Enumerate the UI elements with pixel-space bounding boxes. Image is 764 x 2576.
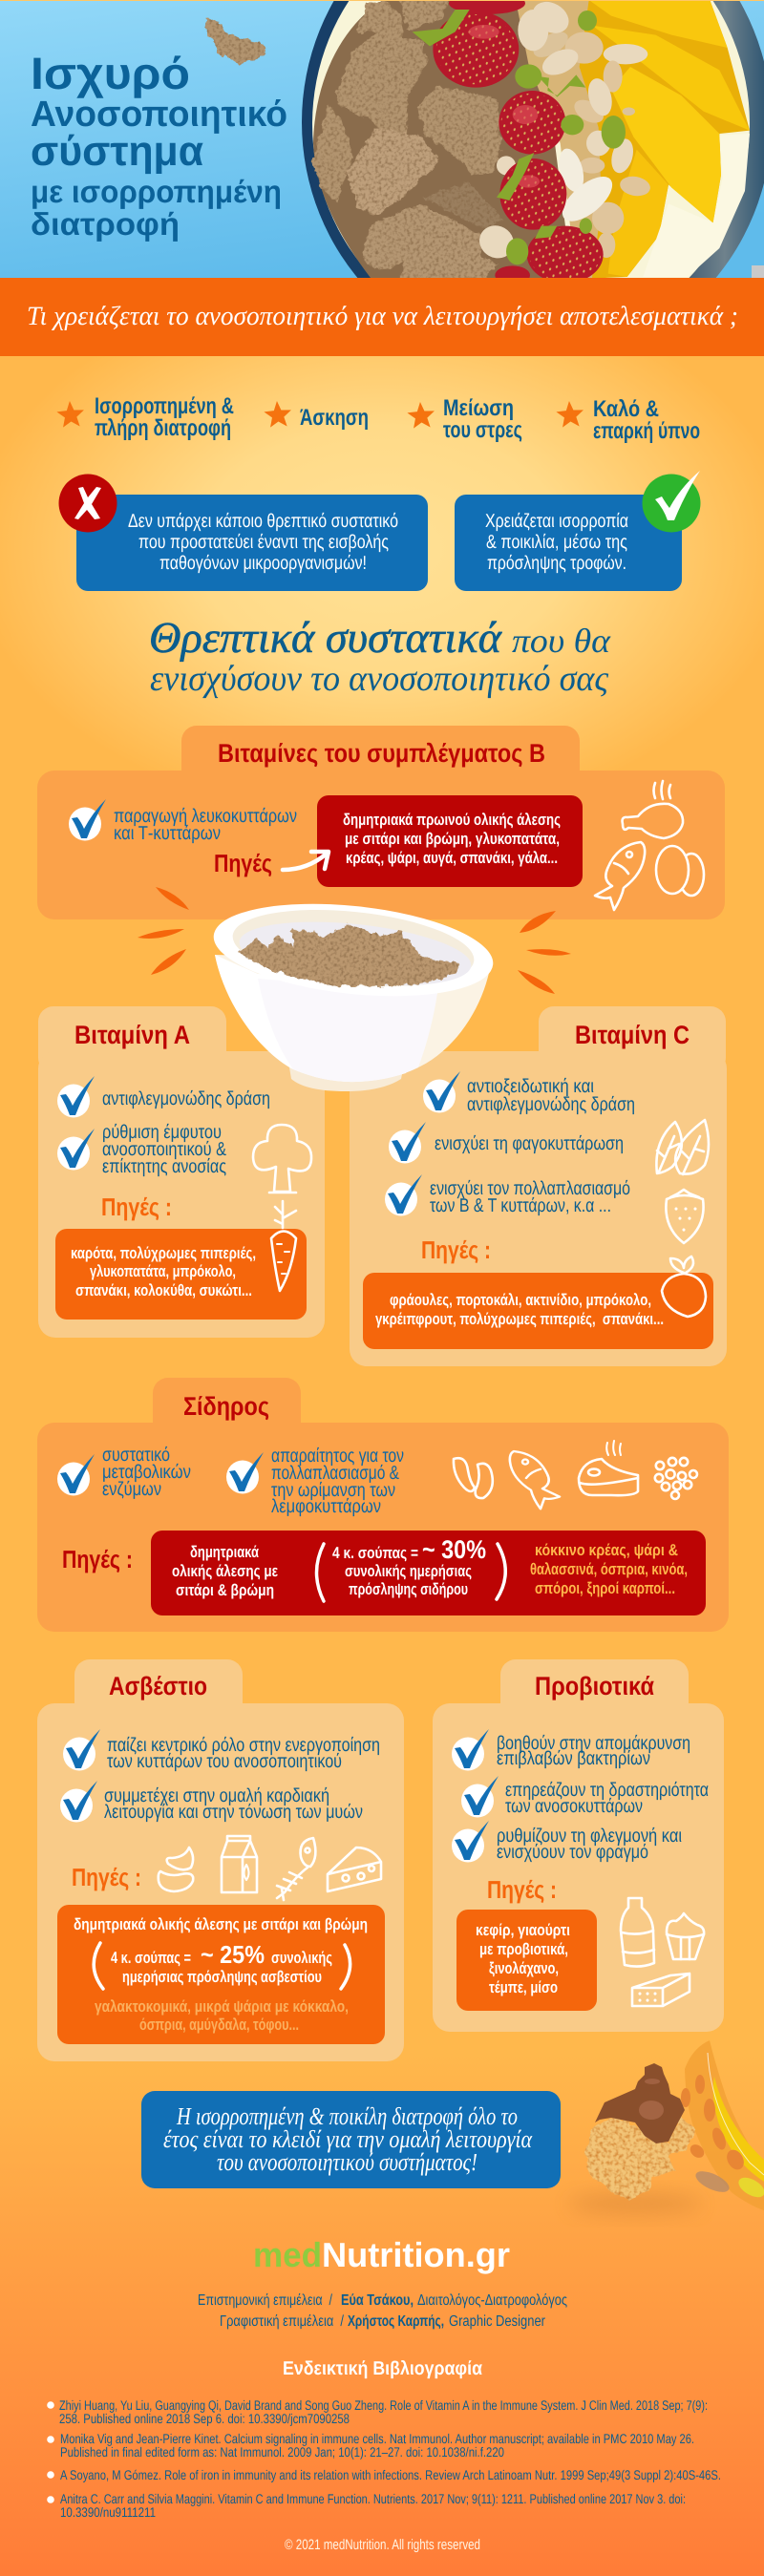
check item: ρυθμίζουν τη φλεγμονή και (497, 1826, 682, 1847)
icon: milk carton (222, 1836, 257, 1892)
check item (461, 1776, 709, 1818)
credits: Εύα Τσάκου, (341, 2292, 414, 2309)
sources box: πρόσληψης σιδήρου (349, 1580, 468, 1598)
burst rays (138, 887, 571, 994)
check item (57, 1445, 191, 1500)
check item (226, 1446, 404, 1517)
check item: την ωρίμανση των (271, 1480, 395, 1501)
heading: iron: Σίδηρος (183, 1392, 269, 1421)
sources box: με προβιοτικά, (479, 1940, 568, 1958)
check item: των ανοσοκυττάρων (505, 1796, 643, 1817)
check item: λεμφοκυττάρων (271, 1496, 381, 1517)
need: balanced diet: πλήρη διατροφή (95, 415, 231, 441)
sources box (317, 795, 583, 887)
sources box: καρότα, πολύχρωμες πιπεριές, (71, 1244, 256, 1262)
sources box: συνολικής ημερήσιας (345, 1562, 472, 1580)
bibliography list: 10.3390/nu9111211 (60, 2504, 156, 2520)
sources box: ημερήσιας πρόσληψης ασβεστίου (122, 1968, 322, 1986)
callout: no single nutrient: που προστατεύει έναντι της εισβολής (138, 532, 389, 553)
title (31, 48, 287, 242)
icon: meat with steam (579, 1441, 638, 1495)
sources box: κρέας, ψάρι, αυγά, σπανάκι, γάλα... (346, 849, 558, 867)
logo: Nutrition.gr (322, 2235, 510, 2274)
credits: Γραφιστική επιμέλεια / (220, 2313, 344, 2330)
copyright: © 2021 medNutrition. All rights reserved (285, 2537, 480, 2553)
icon: leaves (656, 1120, 709, 1174)
sources box: 4 κ. σούπας = (111, 1949, 191, 1967)
closing message: Η ισορροπημένη & ποικίλη διατροφή όλο το (176, 2102, 518, 2130)
hero banner (0, 1, 764, 278)
check item: ενζύμων (102, 1479, 161, 1500)
sources box: σιτάρι & βρώμη (176, 1581, 274, 1599)
icon: bottle (621, 1898, 654, 1967)
heading: calcium: Ασβέστιο (109, 1672, 207, 1700)
icon: carrot (271, 1201, 296, 1291)
sources box: δημητριακά ολικής άλεσης με σιτάρι και βρώμη (74, 1915, 368, 1933)
cookie (585, 2117, 695, 2201)
bibliography list (47, 2397, 721, 2520)
chocolate (595, 2063, 685, 2143)
sources box: σπόροι, ξηροί καρποί... (535, 1579, 675, 1597)
swoosh (681, 2040, 764, 2210)
need: good sleep (556, 396, 700, 444)
check item: αντιφλεγμονώδης δράση (467, 1094, 635, 1115)
callout: balance and variety (455, 471, 701, 591)
sources box: όσπρια, αμύγδαλα, τόφου... (139, 2016, 299, 2034)
closing message: έτος είναι το κλειδί για την ομαλή λειτουργία (163, 2125, 533, 2153)
check item: ανοσοποιητικού & (102, 1139, 227, 1160)
check item (69, 799, 297, 844)
icon: orange (662, 1256, 706, 1317)
credits: Graphic Designer (449, 2313, 546, 2330)
heading: vitamin A: Βιταμίνη Α (74, 1021, 190, 1049)
sources box: 4 κ. σούπας = (332, 1544, 418, 1562)
need: balanced diet (56, 393, 234, 441)
sources box: ~ 30% (422, 1535, 486, 1564)
icon: cheese (328, 1848, 381, 1891)
check item (452, 1821, 682, 1863)
check item: και Τ-κυττάρων (114, 823, 221, 844)
sources box: σπανάκι, κολοκύθα, συκώτι... (75, 1281, 252, 1299)
check item (57, 1122, 227, 1177)
check item (57, 1076, 270, 1117)
need: good sleep: επαρκή ύπνο (593, 418, 700, 444)
callout: balance and variety: πρόσληψης τροφών. (487, 553, 626, 574)
check item (389, 1122, 624, 1163)
check item: επίκτητης ανοσίας (102, 1156, 226, 1177)
panel: vitamin A (38, 1006, 325, 1338)
sources box: ~ 25% (201, 1940, 265, 1969)
heading: vitamin B: Βιταμίνες του συμπλέγματος Β (218, 739, 545, 768)
credits: Επιστημονική επιμέλεια / (198, 2292, 332, 2309)
sources box: ολικής άλεσης με (172, 1562, 278, 1580)
credits (198, 2292, 567, 2330)
check item (452, 1729, 690, 1770)
icon: strawberry (666, 1190, 704, 1243)
panel: calcium (37, 1659, 404, 2061)
sources label: Πηγές : (487, 1875, 557, 1904)
check item: παραγωγή λευκοκυττάρων (114, 806, 297, 827)
sources box: γαλακτοκομικά, μικρά ψάρια με κόκκαλο, (95, 1997, 349, 2016)
sources box (151, 1531, 706, 1615)
credits: Διαιτολόγος-Διατροφολόγος (417, 2292, 567, 2309)
sources box (57, 1905, 385, 2044)
icon: fish bone (277, 1838, 315, 1900)
sources box: ξινολάχανο, (489, 1959, 559, 1977)
title: με ισορροπημένη (31, 174, 282, 209)
check item (60, 1781, 363, 1823)
check item: ρύθμιση έμφυτου (102, 1122, 222, 1143)
sources box: κόκκινο κρέας, ψάρι & (535, 1541, 678, 1559)
heading: vitamin C: Βιταμίνη C (575, 1021, 690, 1049)
sources box: συνολικής (271, 1949, 332, 1967)
sources box: θαλασσινά, όσπρια, κινόα, (530, 1560, 688, 1578)
icon: fish (510, 1451, 560, 1509)
closing message: του ανοσοποιητικού συστήματος! (217, 2148, 478, 2176)
icon: tofu block (632, 1974, 690, 2006)
closing message (141, 2091, 561, 2188)
icon: green check (642, 471, 701, 533)
icon: almonds (159, 1848, 193, 1891)
check item (423, 1071, 635, 1115)
credits: Χρήστος Καρπής, (348, 2313, 444, 2330)
check item: ενισχύουν τον φραγμό (497, 1842, 648, 1863)
check item: παίζει κεντρικό ρόλο στην ενεργοποίηση (107, 1735, 380, 1756)
check item: συστατικό (102, 1445, 170, 1466)
heading: probiotics: Προβιοτικά (535, 1672, 654, 1700)
panel: iron (37, 1378, 729, 1632)
section heading: ενισχύσουν το ανοσοποιητικό σας (150, 659, 609, 699)
check item: αντιοξειδωτική και (467, 1076, 594, 1097)
arrow (283, 852, 329, 870)
sources box (55, 1229, 307, 1320)
check item: συμμετέχει στην ομαλή καρδιακή (104, 1785, 329, 1806)
sources label: Πηγές (214, 849, 272, 877)
sources label: Πηγές : (62, 1545, 133, 1573)
sources box: τέμπε, μίσο (489, 1978, 558, 1996)
icon: chicken leg (623, 781, 683, 838)
need: good sleep: Καλό & (593, 396, 659, 422)
icon: red X (59, 474, 117, 533)
check item: λειτουργία και στην τόνωση των μυών (104, 1802, 363, 1823)
icon: eggs (656, 846, 704, 896)
sources label: Πηγές : (72, 1863, 141, 1891)
orange question band (0, 278, 764, 356)
check item: μεταβολικών (102, 1462, 191, 1483)
bibliography heading: Ενδεικτική Βιβλιογραφία (283, 2358, 483, 2379)
orange question band: Τι χρειάζεται το ανοσοποιητικό για να λειτουργήσει αποτελεσματικά ; (27, 302, 738, 331)
logo: med (253, 2235, 322, 2274)
sources box: κεφίρ, γιαούρτι (476, 1921, 570, 1939)
callout: no single nutrient: Δεν υπάρχει κάποιο θρεπτικό συστατικό (128, 511, 398, 532)
sources box: γλυκοπατάτα, μπρόκολο, (90, 1262, 236, 1280)
bibliography list: Published in final edited form as: Nat Immunol. 2009 Jan; 10(1): 21–27. doi: 10.1038/ni.f.220 (60, 2444, 504, 2460)
title: Ισχυρό (31, 48, 190, 98)
section heading: που θα (512, 622, 611, 660)
bowl illustration (138, 887, 571, 1091)
sources label: Πηγές : (421, 1235, 491, 1264)
check item: βοηθούν στην απομάκρυνση (497, 1733, 690, 1754)
sources box: δημητριακά (190, 1543, 259, 1561)
flake (204, 19, 265, 66)
sources box (456, 1910, 597, 2011)
bibliography list: 258. Published online 2018 Sep 6. doi: 10.3390/jcm7090258 (59, 2411, 350, 2426)
need: stress reduction (407, 395, 522, 443)
section heading (149, 613, 611, 699)
callout: no single nutrient (59, 474, 428, 591)
check item: αντιφλεγμονώδης δράση (102, 1088, 270, 1109)
panel: vitamin C (350, 1006, 727, 1366)
callout: balance and variety: & ποικιλία, μέσω της (486, 532, 627, 553)
sources box (363, 1273, 713, 1349)
title: Ανοσοποιητικό (31, 95, 287, 135)
title: διατροφή (31, 206, 180, 242)
icon: grains (655, 1458, 697, 1499)
sources box: γκρέιπφρουτ, πολύχρωμες πιπεριές, σπανάκι... (375, 1310, 664, 1328)
check item: επηρεάζουν τη δραστηριότητα (505, 1780, 709, 1801)
need: exercise: Άσκηση (300, 405, 369, 431)
callout: balance and variety: Χρειάζεται ισορροπία (485, 511, 628, 532)
icon: broccoli (253, 1125, 311, 1193)
check item: των κυττάρων του ανοσοποιητικού (107, 1751, 342, 1772)
need: balanced diet: Ισορροπημένη & (95, 393, 234, 419)
need: stress reduction: Μείωση (443, 395, 514, 421)
sources box: δημητριακά πρωινού ολικής άλεσης (343, 811, 561, 829)
check item: επιβλαβών βακτηρίων (497, 1748, 650, 1769)
check item: των Β & Τ κυττάρων, κ.α ... (430, 1195, 611, 1216)
needs row (56, 393, 700, 444)
section heading: Θρεπτικά συστατικά (149, 613, 502, 662)
cereal in bowl (239, 923, 460, 986)
panel: probiotics (433, 1659, 724, 2032)
need: stress reduction: του στρες (443, 417, 522, 443)
check item: ενισχύει τον πολλαπλασιασμό (430, 1178, 630, 1199)
title: σύστημα (31, 128, 203, 175)
panel: vitamin B (37, 726, 725, 919)
callout: no single nutrient: παθογόνων μικροοργανισμών! (159, 553, 367, 574)
need: exercise (264, 400, 369, 431)
check item: πολλαπλασιασμό & (271, 1463, 400, 1484)
check item (63, 1729, 380, 1772)
icon: cupcake (667, 1913, 704, 1959)
photo: cereal bowl with strawberries and mango (302, 1, 764, 278)
cookie with chocolate and wheat swoosh (568, 2040, 764, 2214)
icon: beans (454, 1458, 493, 1498)
sources box: με σιτάρι και βρώμη, γλυκοπατάτα, (345, 830, 560, 848)
check item: ενισχύει τη φαγοκυττάρωση (435, 1133, 624, 1154)
check item (385, 1174, 630, 1216)
sources label: Πηγές : (101, 1193, 172, 1221)
check item: απαραίτητος για τον (271, 1446, 404, 1467)
sources box: φράουλες, πορτοκάλι, ακτινίδιο, μπρόκολο, (390, 1291, 651, 1309)
icon: fish (595, 842, 645, 910)
